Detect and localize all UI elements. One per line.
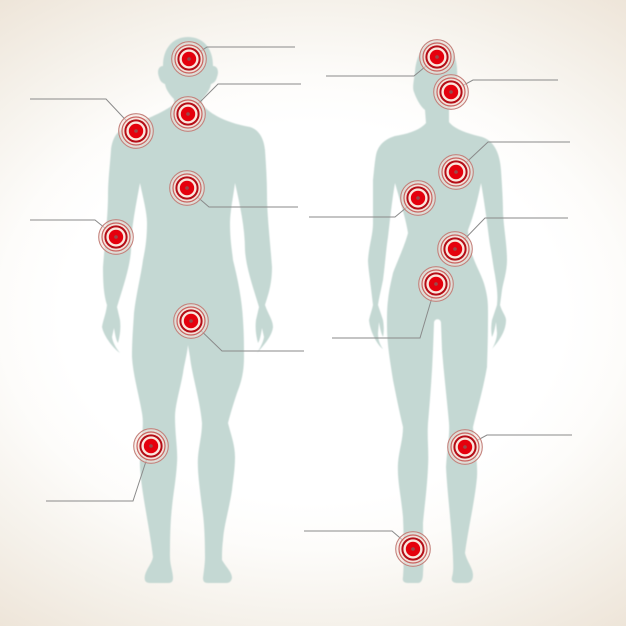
male silhouette: [102, 37, 273, 583]
male pain targets: [99, 42, 208, 463]
female pain targets: [396, 40, 482, 566]
leader lines: [30, 47, 572, 549]
female silhouette: [368, 41, 507, 583]
